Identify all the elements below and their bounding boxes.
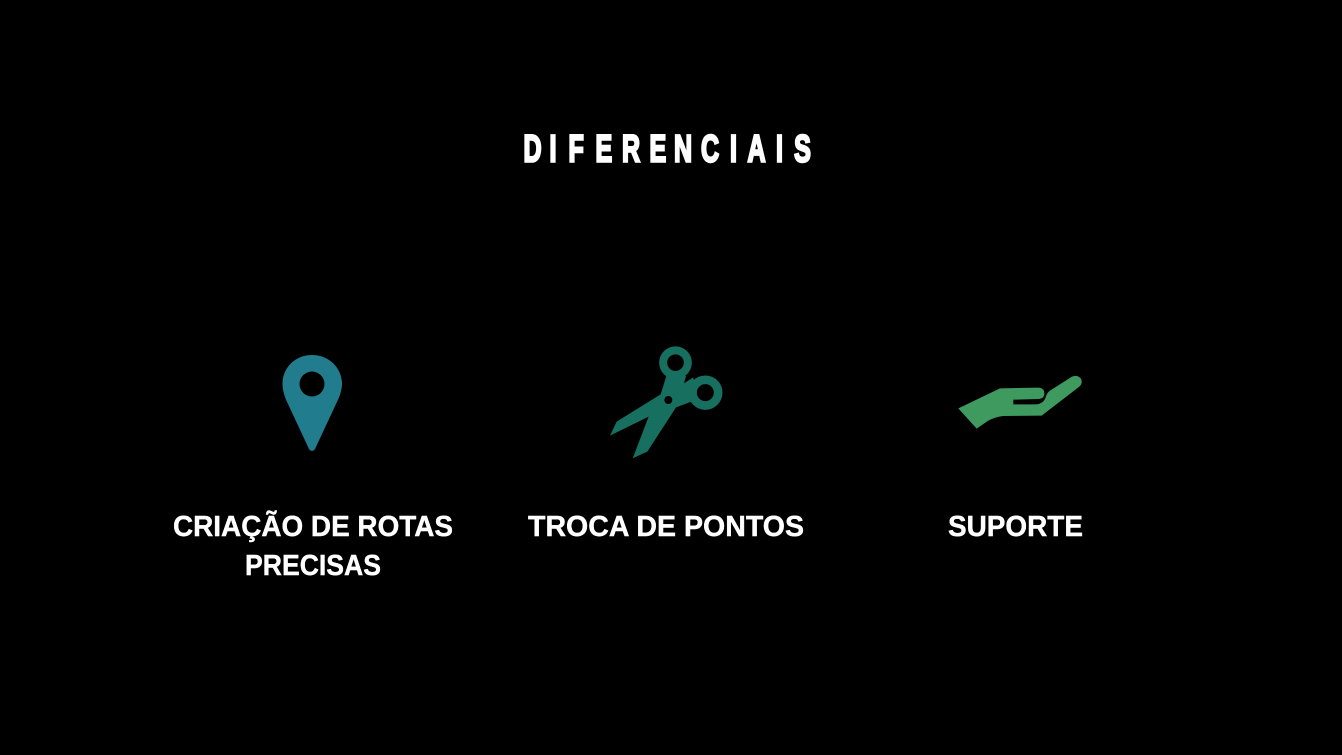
label: suporte: SUPORTE	[948, 511, 1083, 543]
label: criação de rotas precisas	[173, 509, 453, 582]
title: DIFERENCIAIS	[524, 127, 811, 170]
panel: suporte	[948, 376, 1083, 543]
label: criação de rotas precisas: CRIAÇÃO DE ROTAS	[173, 509, 453, 543]
panel: troca de pontos	[528, 350, 804, 543]
icon: open hand	[958, 376, 1082, 429]
panel: criação de rotas	[173, 355, 453, 582]
icon: scissors	[610, 350, 718, 458]
label: criação de rotas precisas: PRECISAS	[245, 550, 381, 582]
icon: map pin	[282, 355, 342, 451]
label: troca de pontos: TROCA DE PONTOS	[528, 511, 804, 543]
